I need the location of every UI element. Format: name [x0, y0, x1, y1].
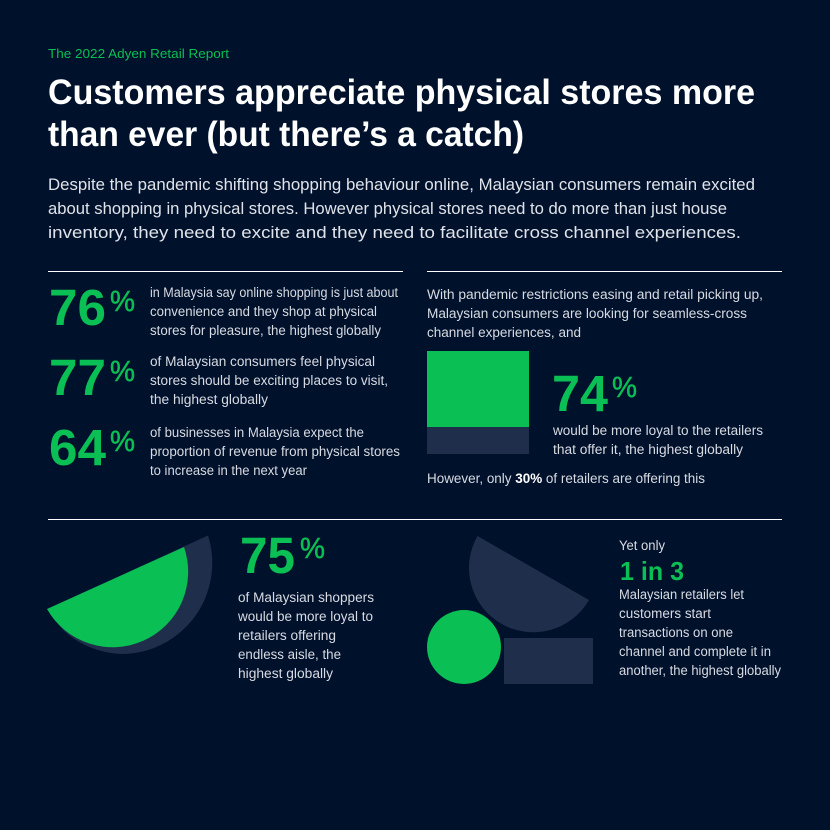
eyebrow label: The 2022 Adyen Retail Report [48, 46, 229, 61]
stat: 64 percent: 64 [49, 419, 107, 476]
stat: 77 percent: of Malaysian consumers feel physical [150, 354, 375, 369]
stat: 76 percent: convenience and they shop at physical [150, 304, 377, 319]
stat: 75 percent: % [300, 533, 325, 565]
stat: 64 percent: to increase in the next year [150, 463, 308, 478]
panel: endless aisle [47, 527, 374, 681]
title [48, 73, 755, 154]
text: cross-channel intro: channel experiences, and [427, 325, 581, 340]
stat: 64 percent: of businesses in Malaysia expect the [150, 425, 364, 440]
stat: 76 percent [49, 279, 398, 338]
stat: 77 percent: stores should be exciting places to visit, [150, 373, 388, 388]
stat: 74 percent: would be more loyal to the retailers [552, 423, 763, 438]
intro paragraph: inventory, they need to excite and they need to facilitate cross channel experiences. [48, 223, 741, 242]
stat: 77 percent: % [110, 356, 135, 388]
stat: 76 percent: % [110, 286, 135, 318]
stat: 75 percent: highest globally [238, 666, 333, 681]
stat: 1 in 3: Malaysian retailers let [619, 587, 744, 602]
text: only 30 percent of retailers: However, only 30% of retailers are offering this [427, 471, 705, 486]
stat: 76 percent: 76 [49, 279, 106, 336]
text: cross-channel intro [427, 287, 763, 340]
stat: 1 in 3: channel and complete it in [619, 644, 771, 659]
stat: 1 in 3 [619, 538, 781, 678]
stat: 1 in 3: another, the highest globally [619, 663, 781, 678]
chart: 74 percent stacked square [427, 351, 529, 454]
panel: seamless cross-channel experiences [427, 287, 763, 486]
icon: overlapping half circles [47, 536, 212, 654]
stat: 74 percent [552, 365, 763, 457]
panel: three store statistics [49, 279, 400, 478]
stat: 75 percent: would be more loyal to [237, 609, 373, 624]
intro paragraph: about shopping in physical stores. However physical stores need to do more than just house [48, 199, 727, 218]
icon: half circle, circle and rectangle [427, 536, 593, 684]
stat: 1 in 3: customers start [619, 606, 711, 621]
stat: 64 percent: proportion of revenue from physical stores [150, 444, 400, 459]
text: cross-channel intro: Malaysian consumers are looking for seamless-cross [427, 306, 747, 321]
stat: 74 percent: 74 [552, 365, 609, 422]
stat: 75 percent: 75 [240, 527, 295, 584]
stat: 1 in 3: Yet only [619, 538, 665, 553]
stat: 76 percent: stores for pleasure, the highest globally [150, 323, 381, 338]
stat: 1 in 3: 1 in 3 [620, 556, 684, 586]
stat: 76 percent: in Malaysia say online shopping is just about [150, 285, 398, 300]
stat: 75 percent: endless aisle, the [238, 647, 341, 662]
stat: 75 percent [237, 527, 374, 681]
stat: 74 percent: that offer it, the highest globally [553, 442, 743, 457]
title: Customers appreciate physical stores more [48, 73, 755, 112]
title: than ever (but there’s a catch) [48, 115, 524, 154]
intro paragraph: Despite the pandemic shifting shopping behaviour online, Malaysian consumers remain excited [48, 175, 755, 194]
stat: 77 percent: the highest globally [150, 392, 268, 407]
intro paragraph [48, 175, 755, 242]
stat: 77 percent: 77 [49, 349, 106, 406]
text: cross-channel intro: With pandemic restrictions easing and retail picking up, [427, 287, 763, 302]
stat: 75 percent: of Malaysian shoppers [238, 590, 374, 605]
stat: 64 percent [49, 419, 400, 478]
stat: 75 percent: retailers offering [238, 628, 336, 643]
stat: 64 percent: % [110, 426, 135, 458]
stat: 74 percent: % [612, 372, 637, 404]
stat: 77 percent [49, 349, 388, 407]
stat: 1 in 3: transactions on one [619, 625, 733, 640]
panel: 1 in 3 retailers [427, 536, 781, 684]
